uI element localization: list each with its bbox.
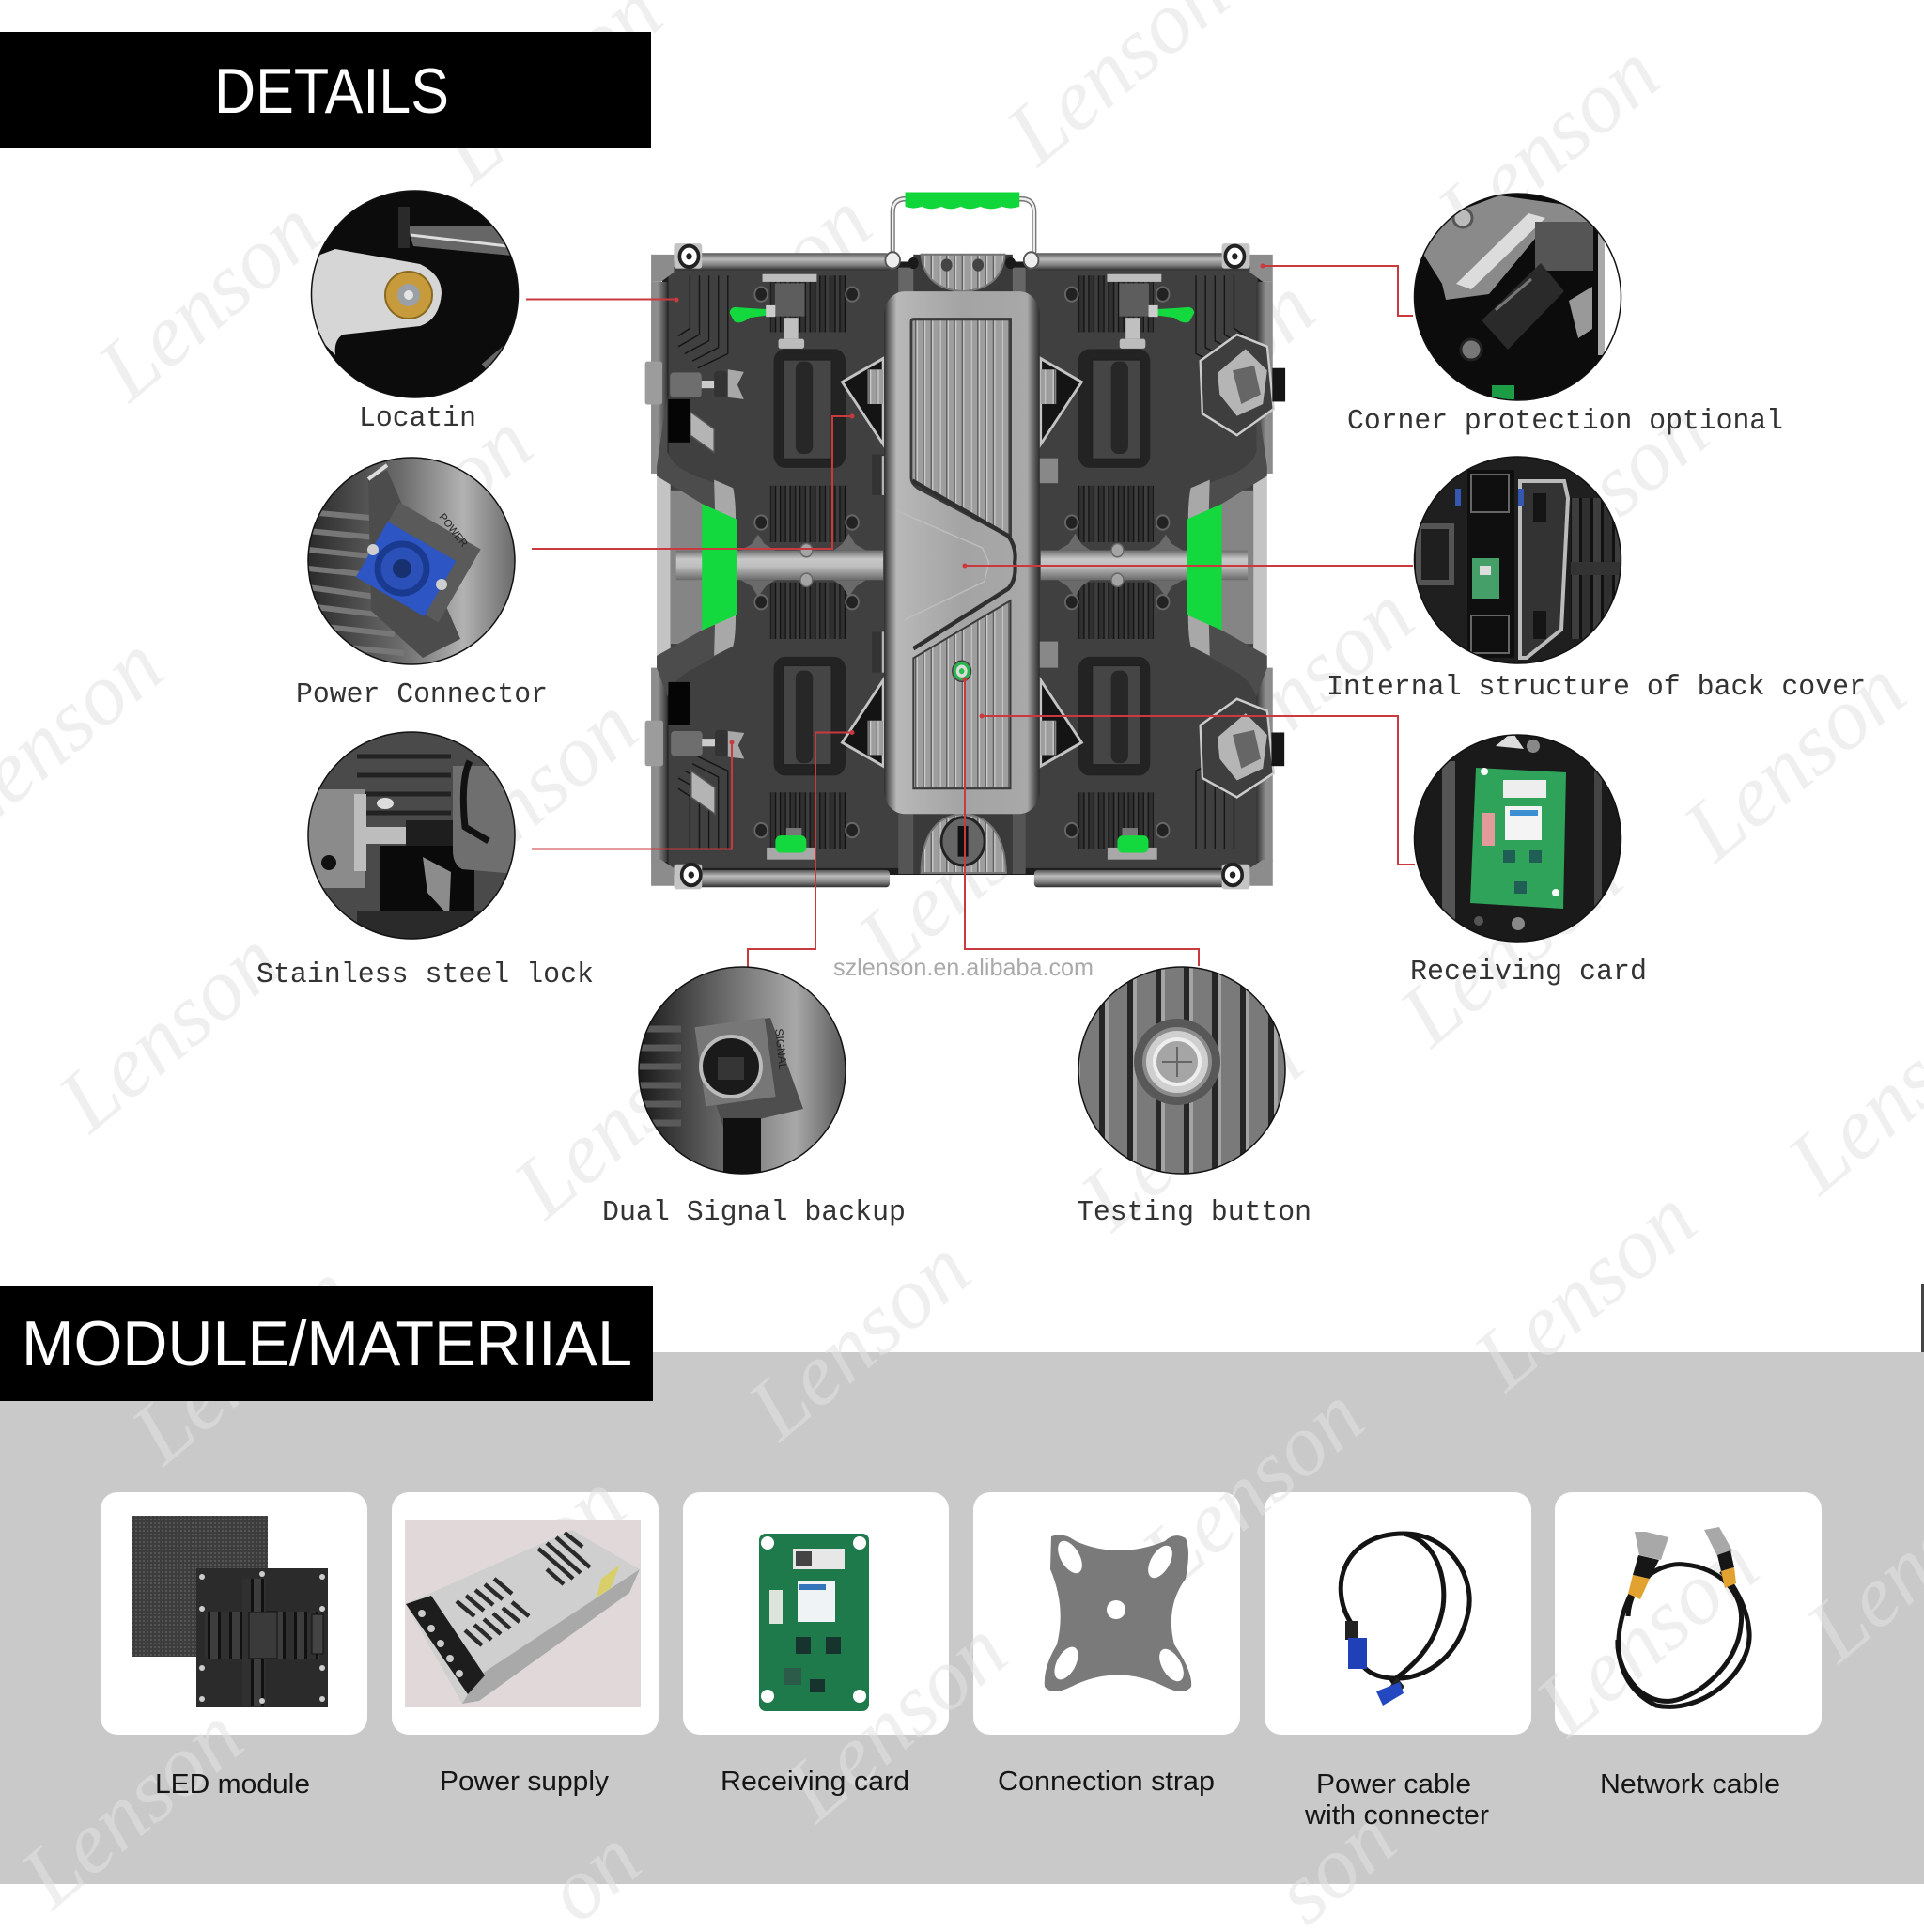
label: Locatin: Locatin <box>359 402 476 435</box>
image: Network cable <box>1618 1527 1749 1706</box>
image: Connection strap <box>1045 1535 1191 1691</box>
cabinet body <box>665 265 1261 871</box>
frame, braces and green side bars <box>651 243 1273 889</box>
Lenson watermarks: Lenson <box>1061 1009 1321 1250</box>
side locks left <box>645 362 744 814</box>
heading: MODULE/MATERIIAL: MODULE/MATERIIAL <box>22 1308 632 1379</box>
LED cabinet back panel <box>645 192 1285 889</box>
Lenson watermarks: Lenson <box>1 1687 261 1927</box>
detail photo: Dual Signal backup <box>639 967 847 1176</box>
module cards row <box>101 1492 1822 1735</box>
edge line at right <box>1921 1284 1924 1352</box>
heading: DETAILS: DETAILS <box>214 55 449 127</box>
label: Receiving card (module): Receiving card <box>721 1767 909 1797</box>
Lenson watermarks: Lenson <box>1073 257 1333 498</box>
detail photo: Receiving card <box>1414 735 1622 943</box>
Lenson watermarks: Lenson <box>78 179 338 420</box>
label: Receiving card (detail): Receiving card <box>1410 956 1647 989</box>
Lenson watermarks: Lenson <box>1664 640 1924 880</box>
clips <box>872 455 1058 673</box>
detail photo: Testing button <box>1078 967 1288 1176</box>
centre back cover <box>884 291 1040 814</box>
detail photo: Locatin <box>310 188 521 399</box>
label: Testing button: Testing button <box>1077 1196 1311 1229</box>
Lenson watermarks: Lenson <box>383 1453 644 1693</box>
Lenson watermarks: Lenson <box>1418 23 1678 264</box>
Lenson watermarks: Lenson <box>112 1243 372 1484</box>
Lenson watermarks: Lenson <box>1171 566 1432 806</box>
Lenson watermarks: Lenson <box>1380 825 1640 1066</box>
Lenson watermarks: Lenson <box>629 172 890 413</box>
label: Power Connector: Power Connector <box>296 678 548 711</box>
label: Power supply: Power supply <box>440 1767 610 1797</box>
bottom arch <box>913 812 1013 874</box>
grey band behind module section <box>0 1352 1924 1884</box>
Lenson watermarks: Lenson <box>1466 381 1727 621</box>
label: Power cable with connecter: Power cable <box>1316 1769 1471 1800</box>
detail photo: Internal structure of back cover <box>1414 457 1622 665</box>
label: Internal structure of back cover: Internal structure of back cover <box>1327 671 1866 704</box>
label: Power cable with connecter <box>1304 1769 1489 1831</box>
detail photo: Stainless steel lock <box>308 732 517 940</box>
quadrant details <box>678 275 1246 849</box>
Lenson watermarks: Lenson <box>396 677 656 917</box>
detail photo: Power Connector <box>308 458 515 664</box>
image: LED module <box>132 1516 328 1707</box>
Lenson watermarks: Lenson <box>765 1600 1025 1841</box>
Lenson watermarks: Lenson <box>1122 1366 1382 1607</box>
Lenson watermarks: Lenson <box>39 911 299 1151</box>
Lenson watermarks: Lenson <box>494 997 754 1238</box>
Lenson watermarks: Lenson <box>1516 1515 1777 1755</box>
label: Dual Signal backup: Dual Signal backup <box>602 1196 906 1229</box>
carry handle <box>892 192 1034 262</box>
testing button on cover <box>953 661 971 681</box>
label: Power cable with connecter: with connecter <box>1304 1800 1489 1831</box>
side connector housings right <box>1201 335 1285 797</box>
heading: MODULE/MATERIIAL <box>0 1286 653 1401</box>
source URL watermark: szlenson.en.alibaba.com <box>833 953 1094 981</box>
label: Connection strap: Connection strap <box>998 1767 1215 1797</box>
image: Receiving card <box>759 1534 869 1711</box>
top arch <box>908 255 1016 293</box>
label: Network cable: Network cable <box>1600 1769 1780 1800</box>
callout leader lines <box>526 263 1415 967</box>
Lenson watermarks: Lenson <box>290 393 551 633</box>
Lenson watermarks: Lenson <box>728 1219 988 1459</box>
image: Power supply <box>405 1520 641 1707</box>
Lenson watermarks: Lenson <box>838 750 1098 990</box>
Lenson watermarks: Lenson <box>1454 1169 1715 1410</box>
label: LED module: LED module <box>155 1769 310 1800</box>
label: Stainless steel lock: Stainless steel lock <box>256 958 594 991</box>
detail photo: Corner protection optional <box>1414 193 1625 402</box>
heading: DETAILS <box>0 32 651 148</box>
image: Power cable <box>1341 1534 1469 1706</box>
detail photo: Dual Signal backup: SIGNAL <box>772 1028 790 1070</box>
detail photo: Power Connector: POWER <box>437 511 470 550</box>
label: Corner protection optional: Corner protection optional <box>1347 405 1783 438</box>
